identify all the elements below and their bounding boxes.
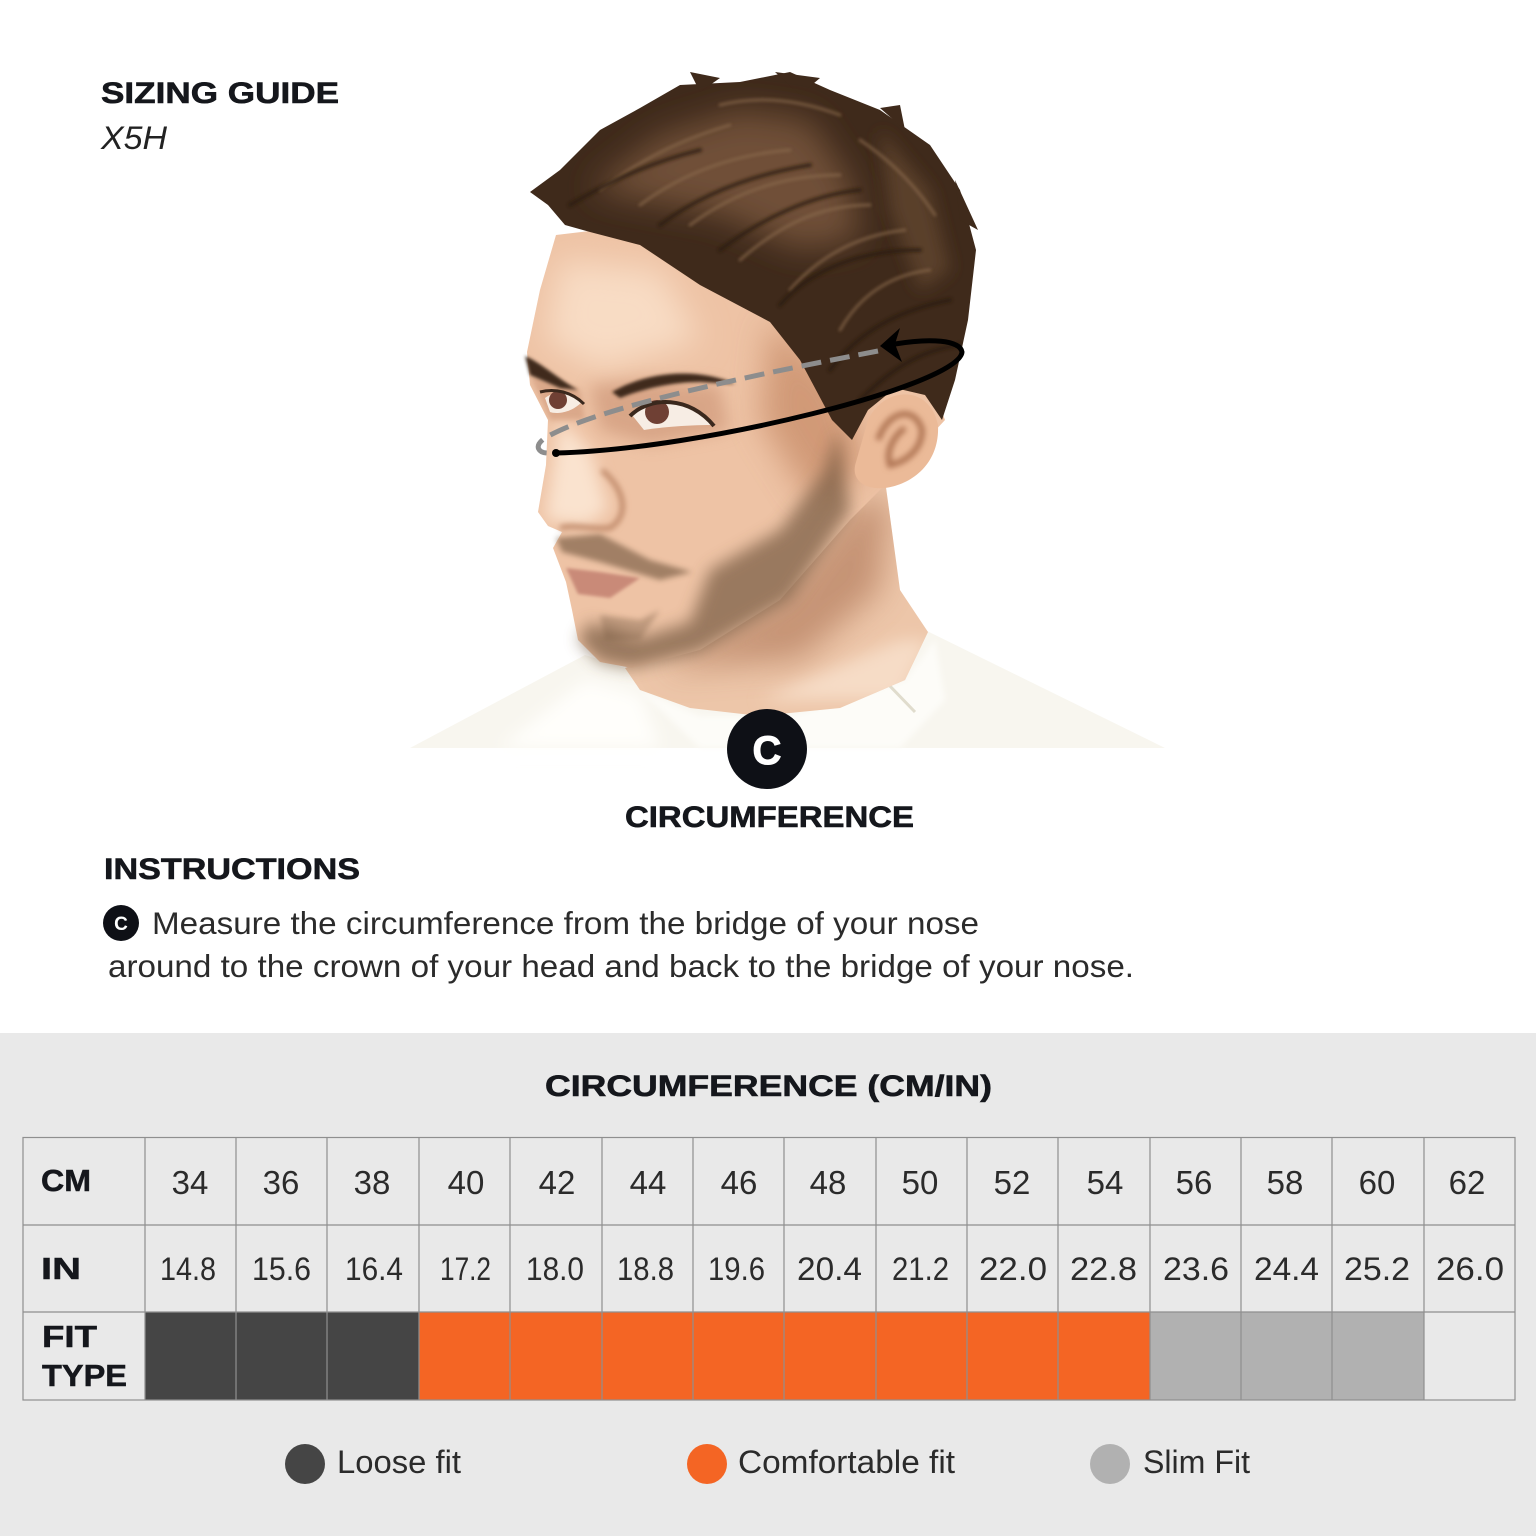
beard bbox=[556, 430, 850, 668]
measuring line: dashed front section bbox=[538, 351, 878, 453]
nose shadow bbox=[560, 470, 622, 528]
icon: C bullet bbox=[103, 905, 139, 941]
illustration: man's head in profile with measuring line bbox=[410, 72, 1165, 748]
legend: Comfortable fit bbox=[738, 1444, 955, 1480]
title: sizing guide: X5H bbox=[100, 120, 168, 156]
row: inch values: 23.6 bbox=[1163, 1251, 1229, 1287]
temple shading bbox=[760, 320, 870, 500]
hair bbox=[530, 72, 978, 440]
grid bbox=[23, 1137, 1515, 1400]
eyebrows bbox=[525, 356, 735, 398]
row: inch values: 26.0 bbox=[1436, 1251, 1504, 1287]
row: cm values: 54 bbox=[1087, 1164, 1123, 1201]
ear bbox=[855, 394, 938, 488]
instructions: Measure the circumference from the bridge of your nose bbox=[152, 905, 979, 941]
legend: Slim Fit bbox=[1143, 1444, 1250, 1480]
row: inch values: 20.4 bbox=[797, 1251, 862, 1287]
row: inch values: 17.2 bbox=[440, 1251, 491, 1287]
row: inch values: 22.8 bbox=[1070, 1251, 1137, 1287]
badge: C bbox=[727, 709, 807, 789]
row: cm values: 34 bbox=[172, 1164, 208, 1201]
row: inch values: 19.6 bbox=[708, 1251, 765, 1287]
row: cm values: 40 bbox=[448, 1164, 484, 1201]
row: cm values: 48 bbox=[810, 1164, 846, 1201]
face bbox=[527, 225, 945, 668]
row: cm values: 46 bbox=[721, 1164, 757, 1201]
row: cm values: 52 bbox=[994, 1164, 1030, 1201]
instructions: around to the crown of your head and back to the bridge of your nose. bbox=[108, 948, 1134, 984]
shirt bbox=[410, 630, 1165, 748]
row: cm values: 38 bbox=[354, 1164, 390, 1201]
row labels: FIT bbox=[42, 1319, 97, 1354]
fit type cells bbox=[145, 1312, 1424, 1400]
row: inch values: 16.4 bbox=[345, 1251, 403, 1287]
row: inch values: 22.0 bbox=[979, 1251, 1047, 1287]
row labels: CM bbox=[41, 1163, 91, 1198]
row: cm values: 60 bbox=[1359, 1164, 1395, 1201]
eyes bbox=[540, 390, 714, 430]
legend: Loose fit bbox=[337, 1444, 461, 1480]
eye socket shading bbox=[590, 380, 730, 445]
neck bbox=[625, 480, 930, 716]
label: circumference: CIRCUMFERENCE bbox=[625, 801, 914, 834]
badge: C: C bbox=[753, 729, 781, 773]
nose highlight bbox=[545, 420, 608, 525]
icon: C bullet: C bbox=[114, 914, 128, 935]
row labels bbox=[41, 1163, 127, 1393]
forehead highlight bbox=[545, 260, 700, 370]
instructions bbox=[103, 853, 1134, 984]
title: sizing guide: SIZING GUIDE bbox=[101, 77, 339, 110]
row: cm values: 36 bbox=[263, 1164, 299, 1201]
row: cm values: 58 bbox=[1267, 1164, 1303, 1201]
row: inch values: 14.8 bbox=[160, 1251, 216, 1287]
panel: size table bbox=[0, 1033, 1536, 1536]
instructions: INSTRUCTIONS bbox=[104, 853, 360, 886]
row: cm values: 62 bbox=[1449, 1164, 1485, 1201]
row labels: TYPE bbox=[42, 1358, 127, 1393]
row: inch values bbox=[160, 1251, 1504, 1287]
row: cm values: 44 bbox=[630, 1164, 666, 1201]
row: inch values: 24.4 bbox=[1254, 1251, 1319, 1287]
row: inch values: 25.2 bbox=[1344, 1251, 1410, 1287]
row labels: IN bbox=[41, 1251, 81, 1286]
title: sizing guide bbox=[100, 77, 339, 156]
row: cm values: 42 bbox=[539, 1164, 575, 1201]
row: inch values: 18.8 bbox=[617, 1251, 674, 1287]
legend bbox=[285, 1444, 1250, 1484]
row: inch values: 15.6 bbox=[252, 1251, 311, 1287]
row: inch values: 18.0 bbox=[526, 1251, 584, 1287]
lips bbox=[566, 568, 640, 598]
measuring line: solid section with arrow bbox=[556, 341, 962, 453]
table heading: CIRCUMFERENCE (CM/IN) bbox=[545, 1070, 992, 1103]
row: cm values: 50 bbox=[902, 1164, 938, 1201]
row: inch values: 21.2 bbox=[892, 1251, 949, 1287]
row: cm values: 56 bbox=[1176, 1164, 1212, 1201]
row: cm values bbox=[172, 1164, 1485, 1201]
